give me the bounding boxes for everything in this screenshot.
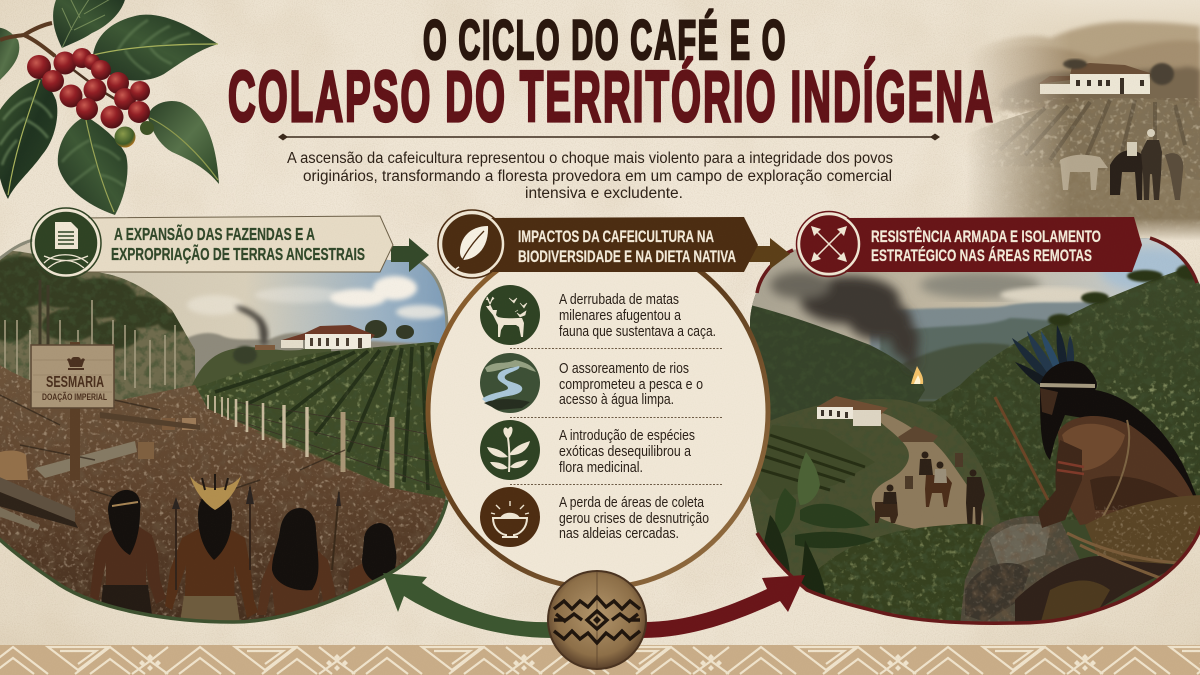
icon: bowl — [480, 487, 540, 547]
right scene outline — [757, 238, 1200, 623]
panel: central circle with impacts — [428, 236, 768, 588]
item: river: acesso à água limpa. — [559, 391, 674, 408]
icon: leaf — [438, 210, 506, 278]
sepia farmhouse — [1038, 63, 1153, 94]
leaf: bottom large — [58, 116, 128, 215]
banner: right: ESTRATÉGICO NAS ÁREAS REMOTAS — [871, 246, 1092, 265]
icon: crown — [67, 357, 85, 370]
item: nutrition: A perda de áreas de coleta — [559, 494, 705, 511]
item: flora: exóticas desequilibrou a — [559, 443, 692, 460]
hair — [1040, 361, 1200, 505]
item: fauna: fauna que sustentava a caça. — [559, 323, 716, 340]
foreground broad leaves — [764, 452, 875, 595]
farmhouse — [817, 396, 938, 442]
valley floor — [750, 399, 1000, 576]
sign: sesmaria: DOAÇÃO IMPERIAL — [42, 392, 107, 403]
panel: sepia plantation backdrop, top right — [972, 0, 1200, 240]
warrior — [995, 325, 1200, 625]
icon: plant — [480, 420, 540, 480]
icon: crossed arrows — [796, 212, 862, 276]
panel: right scene, resistance in the highlands — [750, 236, 1200, 636]
icon: land deed document — [31, 208, 101, 278]
figures: indigenous group seen from behind — [90, 474, 410, 622]
illustration: coffee branch — [0, 0, 219, 215]
item: nutrition — [480, 487, 709, 547]
rope strap — [1095, 420, 1129, 530]
arm — [1038, 440, 1082, 528]
base and sky — [23, 242, 445, 499]
title divider — [278, 134, 940, 140]
branch — [0, 23, 55, 56]
banner: right: RESISTÊNCIA ARMADA E ISOLAMENTO — [871, 227, 1101, 246]
forest backdrop — [0, 245, 200, 405]
intro paragraph: intensiva e excludente. — [525, 185, 683, 202]
smoke — [235, 306, 268, 345]
fence — [208, 395, 447, 490]
rocks — [960, 512, 1080, 625]
left scene outline — [0, 240, 447, 500]
figure 2 — [165, 474, 258, 622]
distant hills — [982, 19, 1200, 72]
canopy on ridge — [1048, 264, 1200, 326]
coffee berries — [27, 48, 150, 128]
dark left hill — [750, 306, 925, 402]
figure 3 — [257, 490, 341, 615]
face — [1040, 388, 1058, 415]
panel: left scene, deforestation and plantation — [0, 236, 450, 636]
coffee field — [190, 340, 450, 505]
item: fauna: A derrubada de matas — [559, 291, 679, 308]
leaf: right lower — [148, 101, 219, 184]
title — [228, 8, 995, 137]
item: flora — [480, 420, 695, 480]
item: nutrition: nas aldeias cercadas. — [559, 525, 679, 542]
distant mountains — [870, 300, 1120, 400]
sign: sesmaria — [31, 342, 114, 480]
leaf: far left upper — [0, 27, 19, 85]
foreground scrub — [818, 524, 992, 621]
leaf: right large — [93, 15, 218, 81]
arrow: centre to right — [748, 238, 790, 269]
item: flora: A introdução de espécies — [559, 427, 695, 444]
icon: river — [480, 353, 540, 413]
bow and arrows — [995, 397, 1048, 500]
item: fauna: milenares afugentou a — [559, 307, 682, 324]
banner: centre: IMPACTOS DA CAFEICULTURA NA — [518, 227, 714, 246]
title: O CICLO DO CAFÉ E O — [423, 8, 787, 71]
base and sky — [750, 236, 1200, 636]
clouds — [187, 276, 444, 319]
terraced field — [760, 426, 874, 498]
smoke plume — [770, 271, 919, 370]
left scene bottom border — [0, 500, 447, 622]
item: flora: flora medicinal. — [559, 459, 643, 476]
figure 4 — [348, 523, 396, 592]
mid treeline — [192, 347, 332, 388]
medallion: woven pattern — [548, 571, 646, 669]
banner: left — [31, 208, 393, 278]
feathers — [1012, 325, 1074, 388]
mountains — [188, 332, 423, 379]
figure 1 — [90, 490, 166, 615]
farmhouse — [255, 325, 375, 350]
sepia coffee field — [974, 108, 1200, 234]
arrow: left to centre — [391, 238, 429, 272]
banner: centre: BIODIVERSIDADE E NA DIETA NATIVA — [518, 247, 736, 266]
intro paragraph — [287, 150, 893, 202]
dirt path — [872, 412, 983, 540]
leaf: left large — [0, 78, 57, 199]
banner: right — [796, 212, 1142, 276]
item: nutrition: gerou crises de desnutrição — [559, 510, 709, 527]
icon: deer and birds — [480, 285, 540, 345]
arrow: red return arrow — [642, 575, 805, 638]
item: fauna — [480, 285, 716, 345]
banner: left: EXPROPRIAÇÃO DE TERRAS ANCESTRAIS — [111, 243, 365, 264]
intro paragraph: originários, transformando a floresta provedora em um campo de exploração comercial — [303, 168, 892, 185]
cleared ground — [0, 355, 450, 630]
banner: centre — [438, 210, 758, 278]
torso — [1058, 416, 1200, 525]
item: river: comprometeu a pesca e o — [559, 376, 703, 393]
tree stumps and logs — [0, 385, 345, 530]
circle body — [428, 236, 768, 588]
banner: left: A EXPANSÃO DAS FAZENDAS E A — [114, 223, 315, 244]
headband — [1040, 385, 1095, 386]
right forested slope — [934, 271, 1200, 520]
legs — [1015, 556, 1180, 625]
leaf: top — [53, 0, 126, 48]
sepia horses and men — [1060, 129, 1183, 200]
arrow: green return arrow — [383, 573, 552, 638]
sign: sesmaria: SESMARIA — [46, 374, 104, 391]
waist straw skirt — [1085, 495, 1200, 565]
decorative bottom band — [0, 645, 1200, 675]
fire — [911, 366, 923, 384]
item: river: O assoreamento de rios — [559, 360, 689, 377]
mounted riders — [875, 452, 985, 533]
item: river — [480, 353, 703, 413]
intro paragraph: A ascensão da cafeicultura representou o choque mais violento para a integridade dos povos — [287, 150, 893, 167]
